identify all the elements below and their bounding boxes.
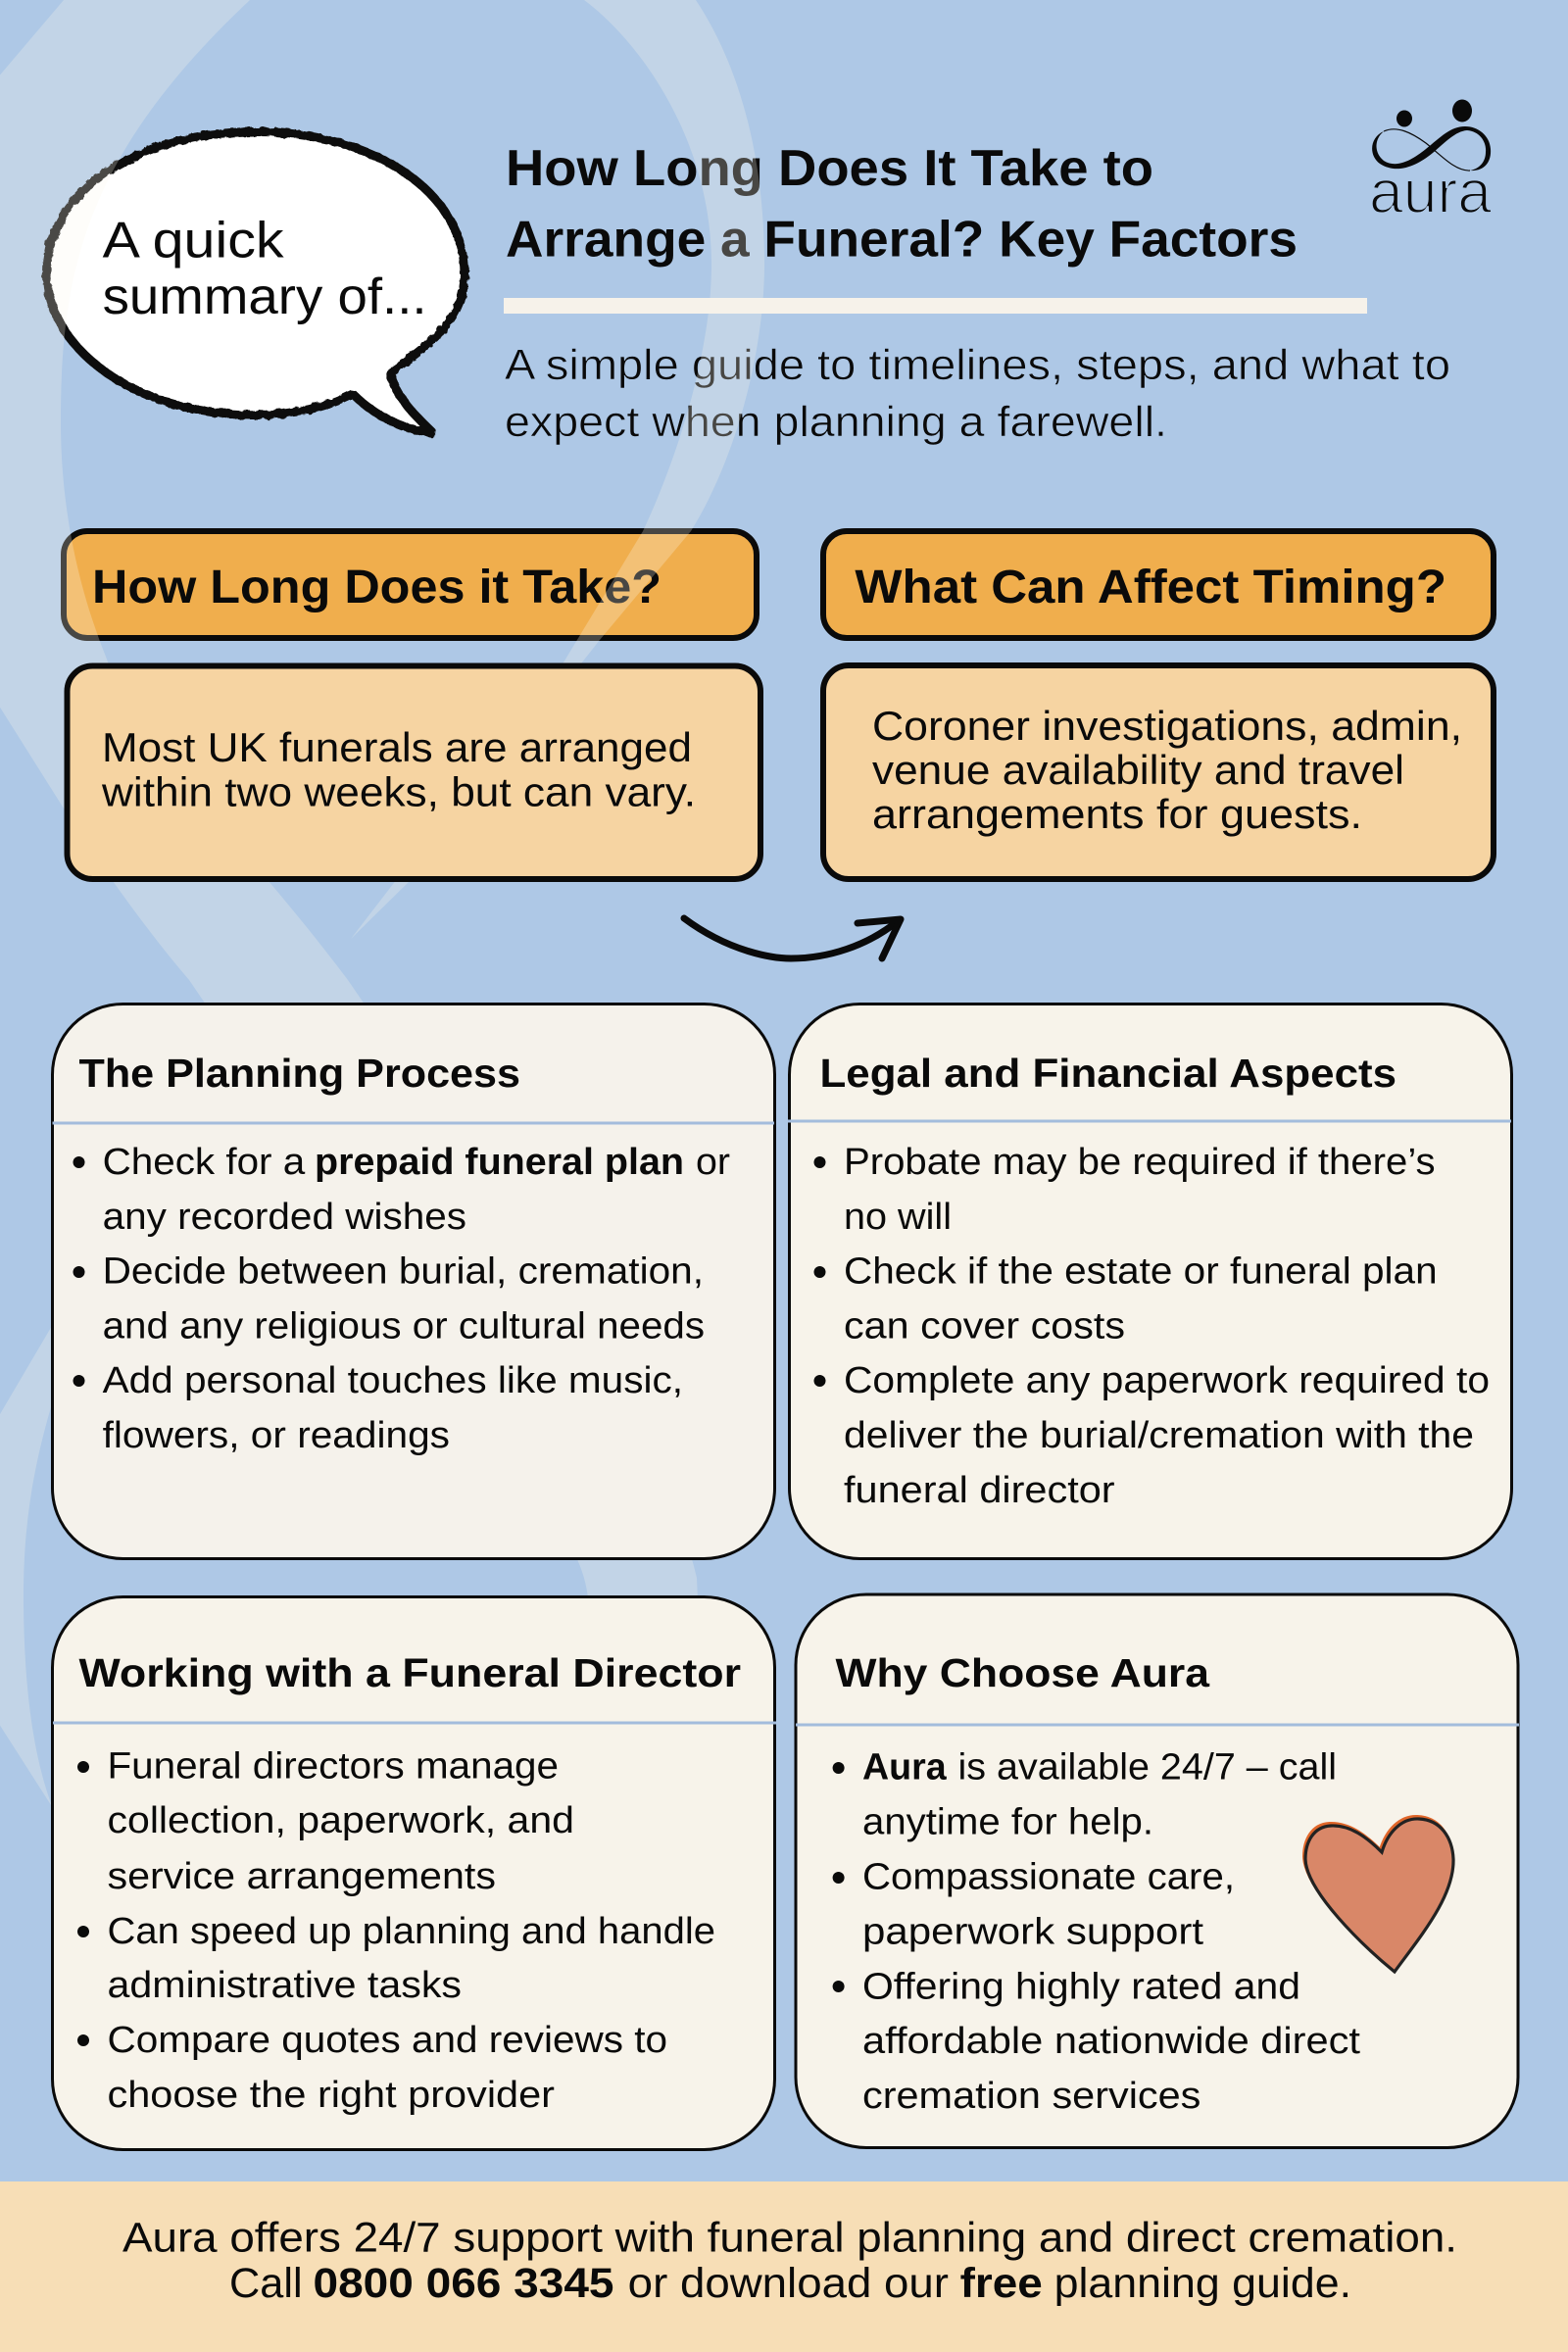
panel: the planning process: Decide between burial, cremation, — [103, 1250, 704, 1292]
panel heading: how long: How Long Does it Take? — [92, 562, 662, 613]
panel: how long answer — [67, 666, 760, 879]
title: Arrange a Funeral? Key Factors — [506, 212, 1298, 269]
panel: legal and financial aspects — [788, 1004, 1511, 1558]
panel: why choose aura: paperwork support — [862, 1912, 1203, 1953]
panel: legal and financial aspects: no will — [844, 1197, 952, 1238]
icon: heart — [1303, 1816, 1453, 1972]
footer banner: or download our — [628, 2260, 949, 2307]
panel: legal and financial aspects: Probate may be required if there’s — [844, 1142, 1436, 1183]
speech bubble: A quick — [103, 213, 285, 270]
footer banner: 0800 066 3345 — [314, 2260, 613, 2307]
panel: working with a funeral director: choose the right provider — [108, 2075, 555, 2116]
panel heading: what can affect timing — [823, 531, 1494, 638]
panel: working with a funeral director: collection, paperwork, and — [108, 1800, 574, 1841]
panel: working with a funeral director — [53, 1597, 776, 2150]
panel: working with a funeral director: Funeral directors manage — [108, 1746, 559, 1788]
background ribbon — [0, 0, 764, 1833]
panel: timing answer: venue availability and travel — [872, 747, 1404, 793]
panel: why choose aura: Aura — [862, 1746, 947, 1788]
footer banner — [0, 2181, 1568, 2352]
title: How Long Does It Take to — [506, 140, 1153, 197]
speech bubble: summary of... — [103, 269, 427, 325]
panel: how long answer: Most UK funerals are arranged — [102, 724, 692, 770]
panel: why choose aura: cremation services — [862, 2076, 1200, 2117]
panel: working with a funeral director: administrative tasks — [108, 1965, 462, 2006]
panel: why choose aura: Offering highly rated and — [862, 1966, 1300, 2007]
panel: the planning process: and any religious or cultural needs — [103, 1305, 705, 1347]
panel: why choose aura: is available 24/7 – call — [958, 1746, 1337, 1788]
panel: why choose aura: anytime for help. — [862, 1801, 1153, 1842]
panel: timing answer: Coroner investigations, admin, — [872, 703, 1462, 749]
panel: the planning process: Add personal touches like music, — [103, 1360, 683, 1401]
panel: legal and financial aspects: can cover costs — [844, 1305, 1125, 1347]
speech bubble — [47, 131, 465, 433]
panel: how long answer: within two weeks, but can vary. — [101, 768, 696, 815]
footer banner: Aura offers 24/7 support with funeral planning and direct cremation. — [122, 2215, 1457, 2262]
panel: why choose aura — [796, 1594, 1519, 2148]
panel: timing answer: arrangements for guests. — [872, 791, 1362, 837]
panel: legal and financial aspects: funeral director — [844, 1470, 1115, 1511]
panel: working with a funeral director: Working with a Funeral Director — [78, 1650, 741, 1695]
footer banner: free — [960, 2260, 1043, 2307]
panel: timing answer — [823, 665, 1494, 879]
title — [506, 140, 1298, 269]
panel: the planning process: prepaid funeral plan — [315, 1142, 684, 1183]
panel: the planning process — [51, 1004, 774, 1558]
panel: working with a funeral director: service arrangements — [108, 1856, 496, 1897]
panel: the planning process: Check for a — [103, 1142, 306, 1183]
panel: working with a funeral director: Can speed up planning and handle — [108, 1911, 715, 1952]
logo: aura — [1369, 100, 1493, 226]
panel: why choose aura: Compassionate care, — [862, 1856, 1235, 1897]
subtitle: A simple guide to timelines, steps, and what to — [505, 341, 1450, 389]
footer banner: planning guide. — [1054, 2260, 1351, 2307]
panel heading: how long — [64, 531, 757, 638]
panel: the planning process: flowers, or readings — [103, 1415, 450, 1456]
footer banner: Call — [229, 2260, 303, 2307]
subtitle — [505, 341, 1450, 446]
subtitle: expect when planning a farewell. — [505, 398, 1167, 446]
panel: the planning process: or — [696, 1142, 730, 1183]
panel: working with a funeral director: Compare quotes and reviews to — [108, 2020, 667, 2061]
arrow — [684, 918, 901, 958]
panel: why choose aura: affordable nationwide direct — [862, 2021, 1360, 2062]
panel: legal and financial aspects: Check if the estate or funeral plan — [844, 1250, 1438, 1292]
panel: why choose aura: Why Choose Aura — [835, 1650, 1210, 1695]
panel: legal and financial aspects: Complete any paperwork required to — [844, 1360, 1490, 1401]
logo: aura: aura — [1369, 159, 1493, 226]
panel: legal and financial aspects: deliver the burial/cremation with the — [844, 1415, 1474, 1456]
panel: legal and financial aspects: Legal and Financial Aspects — [819, 1051, 1396, 1096]
panel heading: what can affect timing: What Can Affect Timing? — [855, 562, 1446, 613]
title divider rule — [504, 298, 1367, 314]
panel: the planning process: The Planning Process — [78, 1051, 520, 1096]
panel: the planning process: any recorded wishes — [103, 1197, 466, 1238]
